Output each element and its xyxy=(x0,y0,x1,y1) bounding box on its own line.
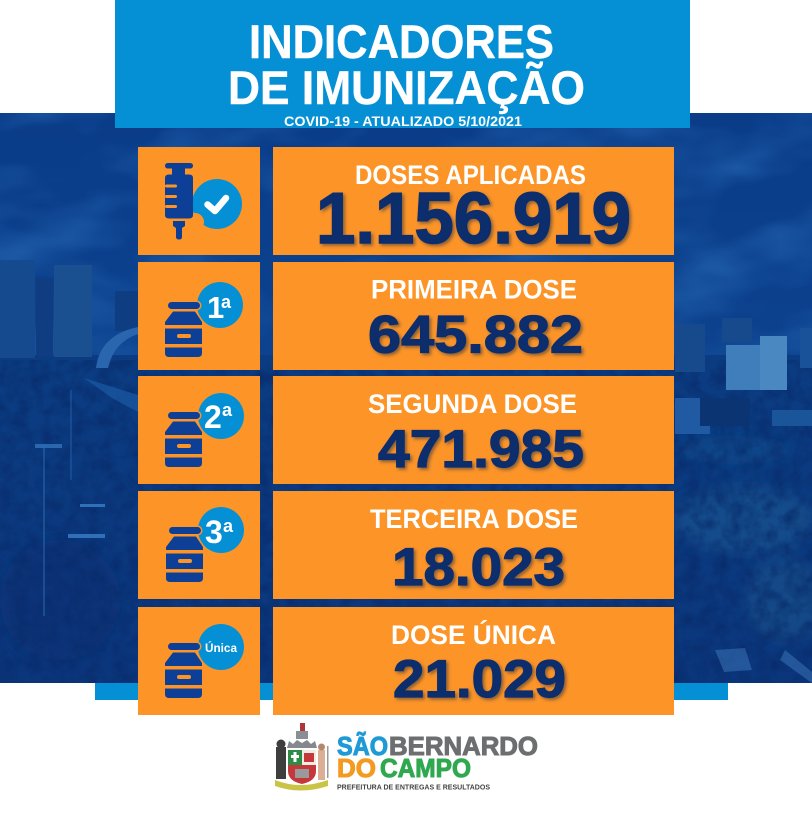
logo wordmark xyxy=(337,731,538,783)
buildings right xyxy=(675,318,812,434)
icon tile: vial unica: Única xyxy=(205,640,237,655)
icon tile: syringe with check xyxy=(138,147,260,255)
icon tile: vial 2a: 2 xyxy=(204,399,222,435)
value panel: DOSE ÚNICA xyxy=(391,619,556,650)
title: INDICADORES xyxy=(249,15,554,68)
title: DE IMUNIZAÇÃO xyxy=(228,61,585,114)
icon tile: vial 3a xyxy=(138,491,260,599)
title xyxy=(228,15,585,114)
icon tile: vial 1a xyxy=(138,262,260,370)
value panel: 471.985 xyxy=(378,420,584,479)
subtitle: COVID-19 - ATUALIZADO 5/10/2021 xyxy=(284,114,523,129)
logo wordmark: DO xyxy=(337,755,376,783)
icon tile: vial 1a: 1 xyxy=(207,290,224,325)
icon tile: vial 1a: a xyxy=(221,292,232,312)
row: doses aplicadas xyxy=(138,147,674,259)
value panel: TERCEIRA DOSE xyxy=(370,504,578,534)
icon tile: vial 2a xyxy=(138,376,260,484)
icon tile: vial 3a: 3 xyxy=(205,514,223,550)
logo wordmark: SÃO xyxy=(337,731,388,761)
value panel: SEGUNDA DOSE xyxy=(368,389,577,419)
icon tile: vial unica xyxy=(138,607,260,715)
value panel: 18.023 xyxy=(392,538,565,597)
value panel: PRIMEIRA DOSE xyxy=(371,274,577,304)
coat of arms xyxy=(275,723,328,790)
header banner xyxy=(115,0,690,129)
value panel xyxy=(273,376,674,484)
row: primeira dose xyxy=(138,262,674,370)
value panel: 645.882 xyxy=(368,306,583,364)
value panel xyxy=(273,607,674,715)
value panel xyxy=(273,262,674,370)
value panel xyxy=(273,491,674,599)
road and lamps xyxy=(35,390,105,616)
icon tile: vial 3a: a xyxy=(223,516,234,536)
logo tagline: PREFEITURA DE ENTREGAS E RESULTADOS xyxy=(337,782,490,792)
buildings left xyxy=(0,260,140,412)
icon tile: vial 2a: a xyxy=(222,400,233,420)
background: blue-tinted city photo xyxy=(0,113,812,683)
footer logo xyxy=(275,723,538,792)
value panel xyxy=(273,147,674,259)
value panel: 1.156.919 xyxy=(316,179,631,259)
value panel: DOSES APLICADAS xyxy=(355,160,586,190)
row: segunda dose xyxy=(138,376,674,484)
row: terceira dose xyxy=(138,491,674,599)
logo wordmark: BERNARDO xyxy=(389,733,538,761)
logo wordmark: CAMPO xyxy=(380,755,471,783)
bottom accent bar xyxy=(95,683,728,700)
value panel: 21.029 xyxy=(393,650,566,709)
row: dose unica xyxy=(138,607,674,715)
